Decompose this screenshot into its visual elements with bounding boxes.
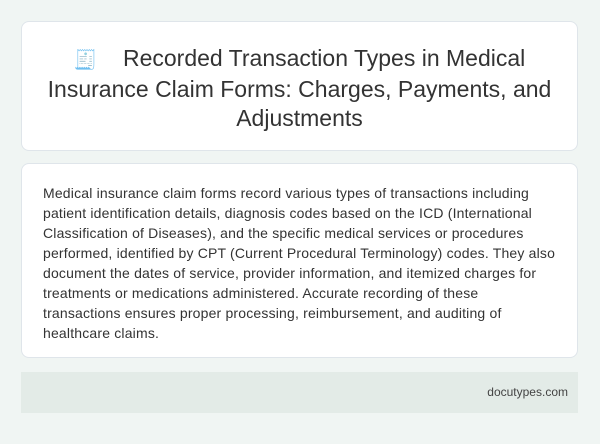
description text: document the dates of service, provider information, and itemized charges for xyxy=(43,265,536,281)
description text: Classification of Diseases), and the specific medical services or procedures xyxy=(43,225,524,241)
description text: Medical insurance claim forms record various types of transactions including xyxy=(43,185,529,201)
description card xyxy=(21,163,578,358)
description text: healthcare claims. xyxy=(43,325,159,341)
footer text: docutypes.com xyxy=(487,385,568,399)
footer xyxy=(21,372,578,413)
description text: performed, identified by CPT (Current Procedural Terminology) codes. They also xyxy=(43,245,555,261)
title card xyxy=(21,21,578,151)
title: 🧾 Recorded Transaction Types in Medical Insurance Claim Forms: Charges, Payments, and Adjustments xyxy=(48,45,551,131)
description text: patient identification details, diagnosis codes based on the ICD (International xyxy=(43,205,532,221)
description text xyxy=(43,185,555,341)
description text: transactions ensures proper processing, reimbursement, and auditing of xyxy=(43,305,502,321)
description text: treatments or medications administered. Accurate recording of these xyxy=(43,285,478,301)
